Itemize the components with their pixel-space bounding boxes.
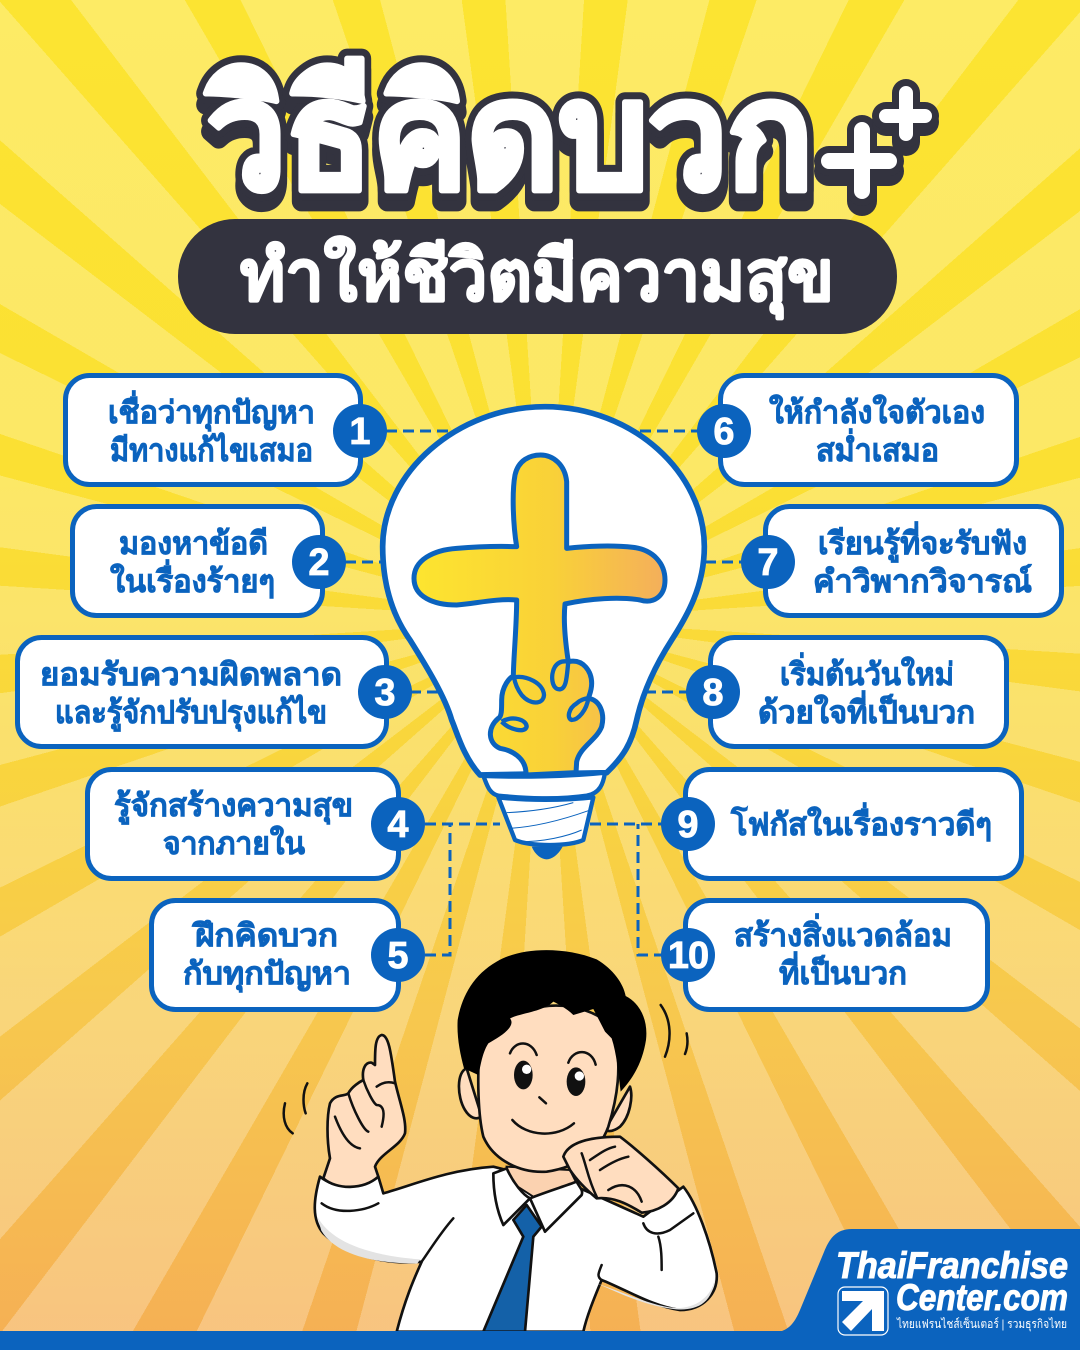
item 8 — [686, 638, 1006, 746]
item 4: รู้จักสร้างความสุข — [114, 788, 353, 825]
item 10 — [661, 900, 988, 1010]
eyebrows — [510, 1044, 596, 1065]
item 10: 10 — [668, 935, 708, 977]
shirt shading — [317, 1217, 715, 1309]
hand at chin — [563, 1137, 678, 1213]
title: วิธีคิดบวก — [205, 63, 813, 231]
item 10: ที่เป็นบวก — [779, 951, 907, 991]
item 7 — [741, 506, 1062, 616]
bulb tip — [532, 847, 563, 859]
bulb screw base — [498, 797, 593, 845]
item 7: 7 — [757, 542, 779, 584]
subtitle pill: ทำให้ชีวิตมีความสุข — [240, 235, 834, 320]
item 6 — [697, 376, 1016, 484]
item 6: ให้กำลังใจตัวเอง — [769, 394, 985, 430]
item 9 — [661, 770, 1022, 878]
logo arrow icon — [838, 1287, 888, 1335]
title: วิธีคิดบวก — [205, 52, 813, 220]
collar — [493, 1168, 582, 1232]
character: man with idea — [284, 950, 717, 1332]
title: วิธีคิดบวก — [205, 52, 813, 220]
item 4 — [88, 770, 425, 878]
bulb glass — [383, 407, 704, 775]
item 9: โฟกัสในเรื่องราวดีๆ — [730, 802, 992, 842]
item 3: ยอมรับความผิดพลาด — [40, 657, 342, 692]
item 4: จากภายใน — [163, 825, 305, 861]
item 2: ในเรื่องร้ายๆ — [110, 559, 275, 599]
ears — [459, 1068, 631, 1131]
item 5 — [152, 900, 425, 1010]
hair — [457, 950, 646, 1092]
item 1: 1 — [349, 411, 371, 453]
item 2: 2 — [308, 542, 330, 584]
item 1: มีทางแก้ไขเสมอ — [110, 432, 313, 468]
item 8: ด้วยใจที่เป็นบวก — [758, 690, 975, 730]
item 7: เรียนรู้ที่จะรับฟัง — [818, 521, 1027, 563]
bulb collar — [483, 773, 605, 798]
item 1: เชื่อว่าทุกปัญหา — [108, 390, 315, 432]
subtitle pill — [178, 219, 897, 334]
item 3: 3 — [374, 672, 396, 714]
item 5: กับทุกปัญหา — [183, 956, 351, 993]
shirt details — [322, 1203, 693, 1280]
item 6: 6 — [713, 411, 735, 453]
raised hand — [323, 1035, 405, 1187]
item 3 — [18, 638, 412, 746]
neck — [507, 1167, 577, 1197]
item 2 — [72, 506, 346, 616]
nose and mouth — [512, 1097, 574, 1134]
connector lines — [345, 431, 745, 955]
shirt — [315, 1167, 717, 1332]
item 9: 9 — [677, 804, 699, 846]
item 10: สร้างสิ่งแวดล้อม — [734, 913, 952, 953]
item 6: สม่ำเสมอ — [816, 428, 939, 468]
motion lines — [284, 1005, 687, 1133]
footer band and logo: ThaiFranchise — [836, 1245, 1068, 1286]
tie — [483, 1205, 542, 1332]
footer band and logo — [0, 1229, 1080, 1350]
item 1 — [66, 376, 387, 484]
light bulb — [383, 407, 704, 859]
item 5: ฝึกคิดบวก — [192, 918, 338, 953]
eyes — [514, 1061, 533, 1089]
item 3: และรู้จักปรับปรุงแก้ไข — [55, 694, 327, 732]
item 8: เริ่มต้นวันใหม่ — [780, 652, 954, 692]
item 4: 4 — [387, 804, 409, 846]
item 7: คำวิพากวิจารณ์ — [813, 564, 1032, 599]
item 8: 8 — [702, 672, 724, 714]
item 2: มองหาข้อดี — [119, 526, 268, 561]
item 5: 5 — [387, 935, 409, 977]
face — [478, 1006, 618, 1172]
